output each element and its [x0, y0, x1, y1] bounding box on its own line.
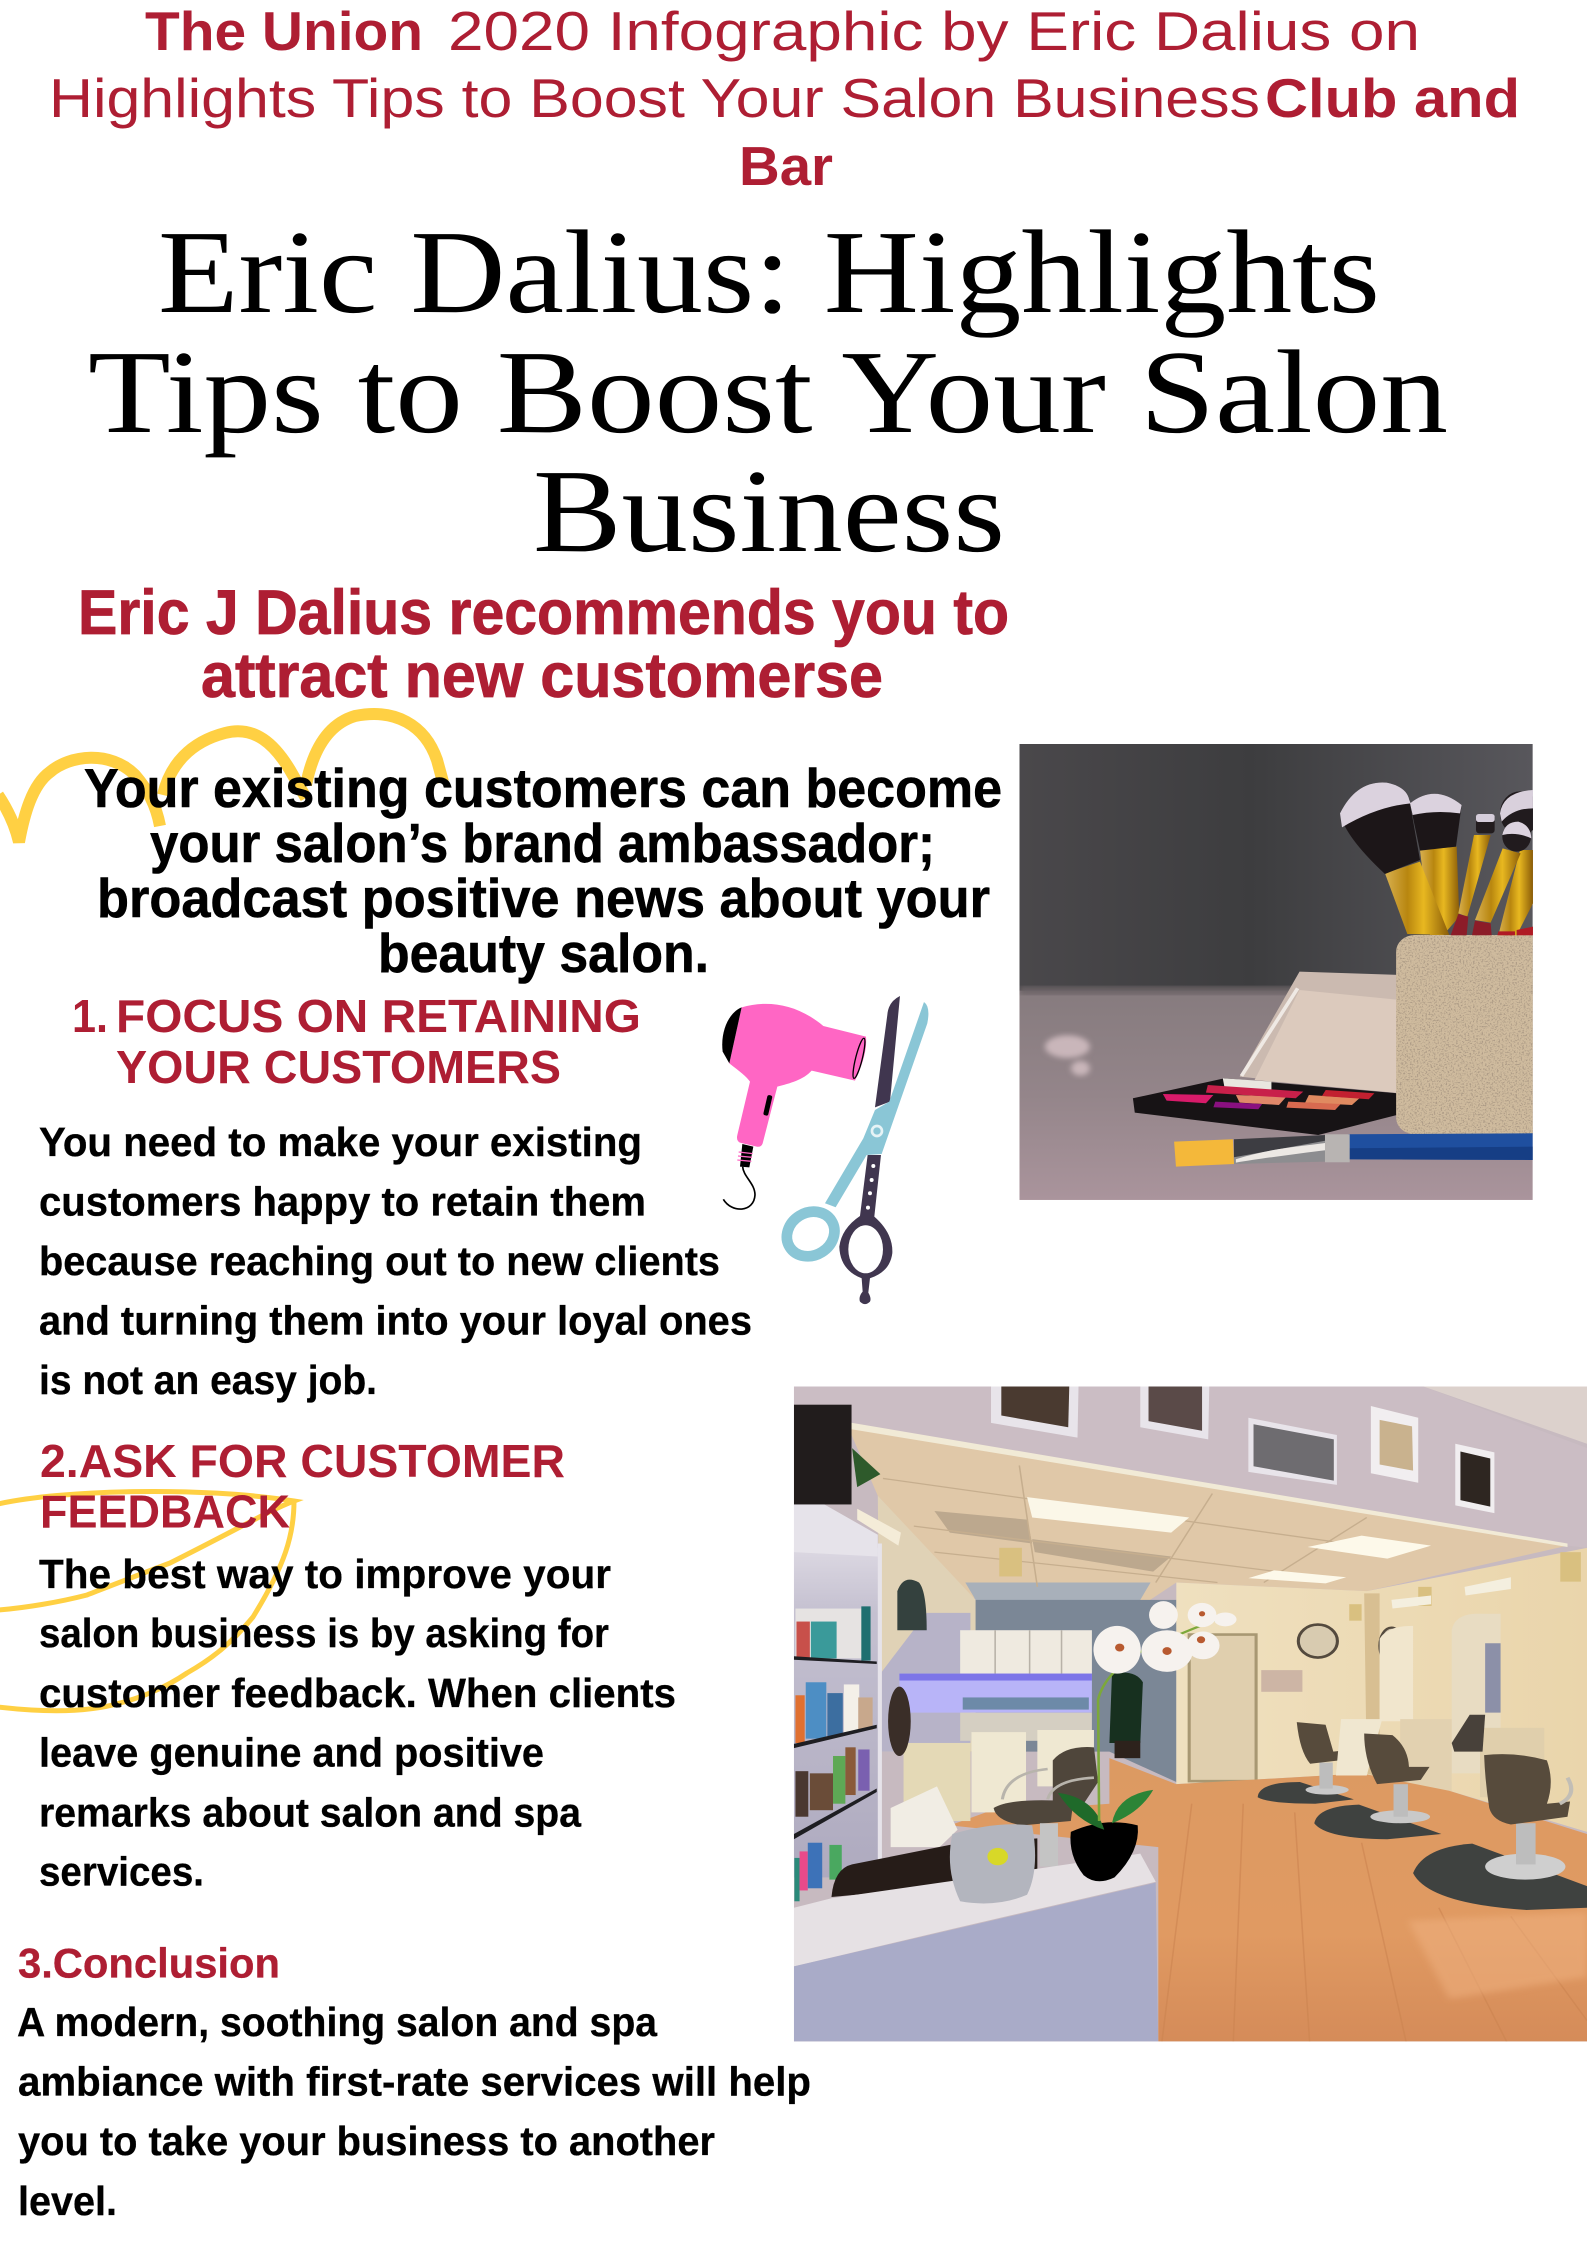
photo: makeup brushes in sand pot — [1019, 744, 1553, 1200]
body text: conclusion: you to take your business to another — [18, 2118, 715, 2164]
body text: conclusion: A modern, soothing salon and spa — [17, 1999, 658, 2045]
lead text: beauty salon. — [378, 922, 709, 984]
subheading — [78, 578, 1009, 711]
right stylist chairs and mats — [1258, 1715, 1587, 1910]
body text: section 1: because reaching out to new clients — [39, 1238, 720, 1284]
body text: section 2: salon business is by asking for — [39, 1610, 609, 1656]
body text: section 2: customer feedback. When clients — [39, 1670, 676, 1716]
decorative yellow scribble: loop behind section 2 — [0, 1491, 294, 1711]
body text: conclusion: ambiance with first-rate services will help — [18, 2058, 811, 2104]
photo: salon interior — [794, 1386, 1587, 2050]
cabinets and wash stations — [960, 1630, 1092, 1674]
door — [1189, 1635, 1256, 1781]
back wall — [970, 1600, 1176, 1782]
plant by back wall — [1109, 1673, 1143, 1743]
body text: section 1: You need to make your existing — [39, 1119, 642, 1165]
stylist chair near counter — [994, 1747, 1098, 1825]
header: source line: 2020 Infographic by Eric Dalius on — [448, 0, 1420, 62]
wall soffit with frames — [794, 1386, 1587, 1548]
body text: section 1: is not an easy job. — [39, 1357, 377, 1403]
main title — [88, 206, 1448, 577]
pendant lamps — [999, 1548, 1581, 1621]
body text: section 2: The best way to improve your — [39, 1551, 611, 1597]
body text: section 2: services. — [39, 1848, 204, 1894]
header: source line: Highlights Tips to Boost Your Salon Business — [49, 67, 1260, 129]
lead text: broadcast positive news about your — [97, 867, 990, 929]
floor — [950, 1758, 1587, 2050]
counter — [831, 1838, 1037, 1897]
left shelves — [794, 1548, 880, 1877]
body text: section 2: leave genuine and positive — [39, 1730, 544, 1776]
orchid and black pot — [1070, 1822, 1138, 1881]
decorative yellow scribble: loops behind lead text — [0, 714, 443, 842]
brush heads and ferrules — [1340, 782, 1540, 935]
subheading: attract new customerse — [201, 641, 883, 711]
heading: section 2 — [40, 1435, 565, 1538]
wall wheel — [1298, 1625, 1337, 1658]
ceiling — [847, 1424, 1567, 1606]
lead text: Your existing customers can become — [84, 757, 1002, 819]
lead text: your salon’s brand ambassador; — [150, 812, 935, 874]
heading: section 1 — [72, 990, 641, 1093]
main title: Tips to Boost Your Salon — [88, 326, 1448, 458]
icon: hair dryer — [722, 1004, 867, 1209]
heading: section 1: YOUR CUSTOMERS — [116, 1041, 561, 1093]
products — [794, 1606, 877, 1901]
body text: section 1 — [39, 1119, 752, 1403]
header: source line: The Union — [145, 0, 423, 62]
icon: scissors — [778, 996, 928, 1304]
lead text — [84, 757, 1002, 984]
main title: Eric Dalius: Highlights — [158, 206, 1380, 338]
heading: section 2: 2.ASK FOR CUSTOMER — [40, 1435, 565, 1487]
mirrors — [1452, 1614, 1501, 1773]
left wall — [878, 1496, 976, 1752]
header: source line: Bar — [739, 135, 833, 197]
heading: section 1: FOCUS ON RETAINING — [116, 990, 641, 1042]
body text: section 1: customers happy to retain them — [39, 1178, 646, 1224]
body text: conclusion: level. — [18, 2178, 117, 2224]
body text: section 2: remarks about salon and spa — [39, 1790, 582, 1836]
heading: section 2: FEEDBACK — [40, 1486, 290, 1538]
heading: section 3: 3.Conclusion — [18, 1940, 280, 1986]
body text: conclusion — [17, 1999, 811, 2224]
cream walls — [1176, 1548, 1587, 1832]
subheading: Eric J Dalius recommends you to — [78, 578, 1009, 648]
heading: section 1: 1. — [72, 990, 108, 1042]
wall pictures — [991, 1386, 1494, 1513]
bowl of candy — [950, 1824, 1035, 1903]
body text: section 2 — [39, 1551, 676, 1894]
body text: section 1: and turning them into your loyal ones — [39, 1298, 752, 1344]
header: source line: Club and — [1265, 67, 1520, 129]
main title: Business — [533, 445, 1005, 577]
header: source line — [49, 0, 1520, 197]
